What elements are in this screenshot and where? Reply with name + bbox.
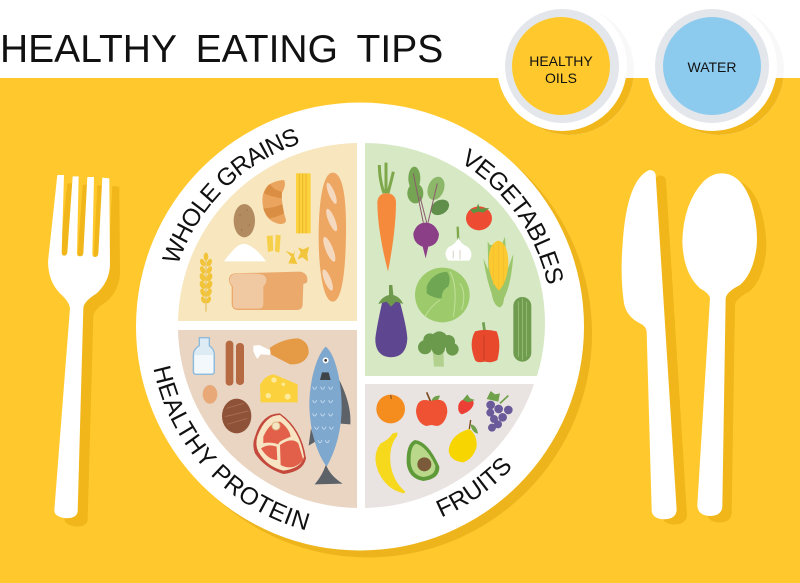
plate: water: WATER [688, 59, 736, 75]
icon: spaghetti [296, 173, 311, 233]
title: HEALTHY EATING TIPS [0, 28, 443, 71]
panel: whole grains [178, 143, 357, 321]
icon: avocado [407, 440, 439, 481]
icon: egg [203, 385, 217, 404]
label: whole grains: WHOLE GRAINS [162, 129, 298, 261]
fork [48, 175, 120, 527]
panel: healthy protein [178, 330, 357, 508]
icon: cucumber [513, 297, 531, 362]
icon: burger patty [222, 399, 251, 433]
icon: strawberry [458, 394, 475, 414]
panel: fruits [365, 384, 534, 508]
panel: vegetables [365, 143, 545, 376]
icon: lemon [449, 420, 478, 462]
icon: orange [376, 395, 405, 423]
icon: sausages [226, 341, 244, 386]
plate: healthy oils: HEALTHY [529, 53, 593, 69]
icon: grapes [486, 391, 513, 432]
icon: bread loaf [229, 272, 307, 310]
plate: healthy oils [497, 1, 634, 135]
icon: flour [224, 244, 266, 261]
knife [622, 170, 687, 525]
icon: tomato [466, 203, 492, 230]
icon: garlic [445, 227, 471, 261]
icon: carrot [377, 163, 396, 272]
icon: banana [375, 432, 405, 493]
icon: apple [416, 392, 447, 426]
icon: wheat [198, 253, 214, 312]
icon: fish [309, 347, 350, 484]
plate: healthy oils: OILS [545, 70, 577, 86]
icon: corn [483, 237, 513, 307]
icon: milk bottle [193, 338, 214, 374]
icon: potato [234, 204, 255, 237]
icon: croissant [262, 180, 286, 224]
icon: chicken leg [253, 338, 309, 364]
icon: farfalle [285, 247, 309, 264]
plate: water [647, 1, 784, 135]
icon: penne [267, 235, 281, 253]
icon: steak [253, 413, 306, 474]
spoon [682, 173, 766, 523]
icon: eggplant [375, 285, 407, 357]
icon: cheese [260, 374, 298, 402]
label: healthy protein: HEALTHY PROTEIN [154, 366, 310, 530]
icon: baguette [319, 173, 346, 302]
icon: beet [407, 167, 452, 258]
main plate [136, 102, 592, 558]
icon: broccoli [418, 331, 459, 367]
label: fruits: FRUITS [436, 458, 510, 517]
label: vegetables: VEGETABLES [466, 148, 563, 284]
icon: red pepper [472, 322, 499, 362]
icon: cabbage [415, 268, 470, 322]
